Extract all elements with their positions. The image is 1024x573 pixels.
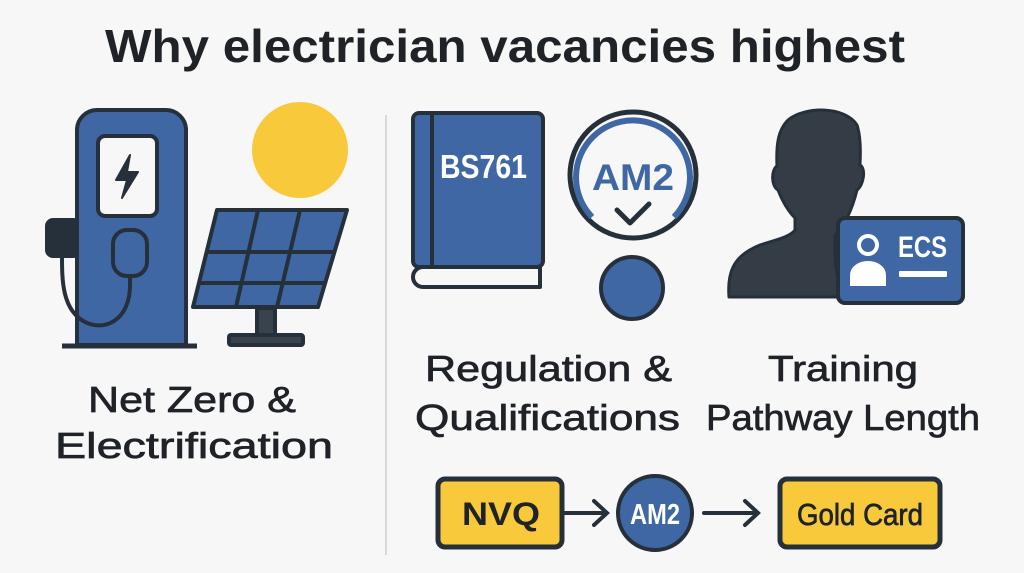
- circle: AM2: [618, 476, 692, 550]
- box: NVQ: [438, 479, 562, 547]
- icon: ECS card: ECS: [898, 231, 947, 264]
- panel: regulation: [413, 112, 696, 438]
- panel: net zero: [47, 102, 348, 466]
- arrow: [704, 501, 758, 525]
- title: Why electrician vacancies highest: [105, 20, 905, 72]
- icon: sun: [252, 102, 348, 198]
- box: Gold Card: [780, 479, 940, 547]
- flow: NVQ to AM2 to Gold Card: NVQ: [462, 496, 540, 532]
- icon: AM2 badge: [570, 112, 696, 319]
- flow: NVQ to AM2 to Gold Card: AM2: [630, 499, 680, 531]
- icon: person silhouette: [729, 110, 864, 297]
- text: training label: Training: [768, 348, 918, 389]
- text: regulation label: Regulation &: [425, 348, 672, 389]
- flow: NVQ to AM2 to Gold Card: Gold Card: [797, 497, 923, 532]
- panel: net zero: Electrification: [55, 425, 333, 466]
- text: net zero label: Net Zero &: [88, 379, 296, 420]
- icon: BS761 book: [413, 113, 543, 287]
- icon: AM2 badge: AM2: [592, 157, 674, 198]
- icon: EV charger: [47, 110, 197, 346]
- panel: training: Pathway Length: [706, 397, 980, 438]
- flow: NVQ to AM2 to Gold Card: [438, 476, 940, 550]
- panel: regulation: BS761: [440, 148, 527, 185]
- arrow: [562, 501, 607, 525]
- icon: solar panel: [193, 210, 347, 345]
- panel: training: [706, 110, 980, 438]
- panel: regulation: Qualifications: [415, 397, 680, 438]
- icon: ECS card: [838, 218, 963, 303]
